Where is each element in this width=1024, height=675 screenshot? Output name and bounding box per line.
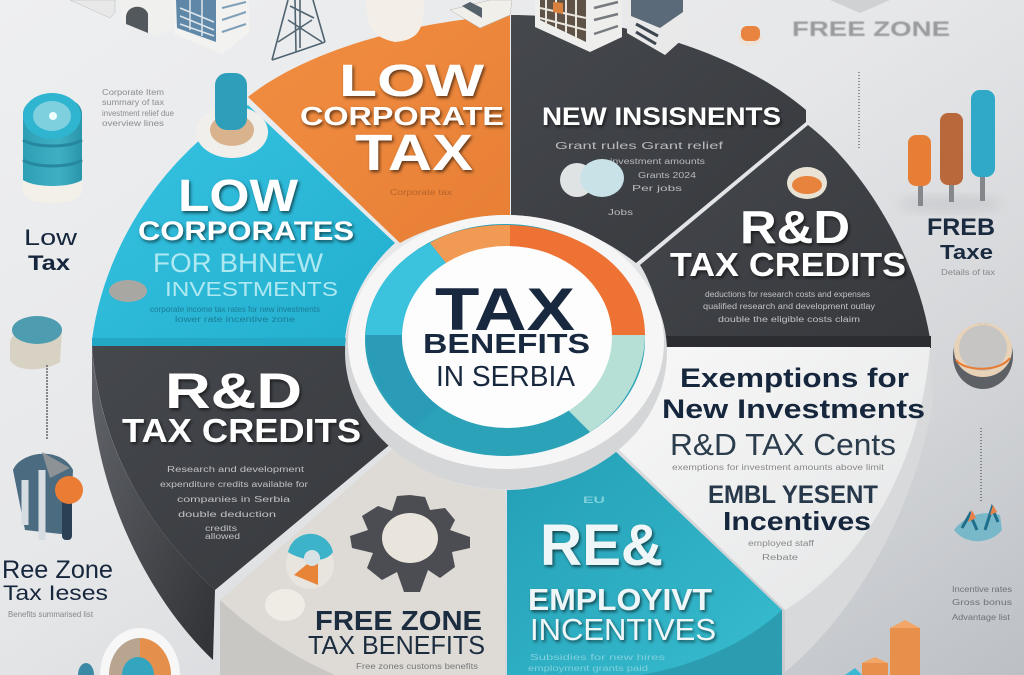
- small text: R&D left: credits: [205, 524, 237, 533]
- center title: BENEFITS: [423, 328, 590, 359]
- small text: left upper: summary of tax: [102, 98, 164, 107]
- slice edge: cyan: [92, 338, 346, 346]
- text: for new investments: INVESTMENTS: [165, 279, 338, 301]
- center disc: [402, 246, 612, 428]
- text: low corporate tax: LOW: [339, 55, 485, 106]
- ring: light orange arc: [430, 225, 510, 268]
- slice side: teal edge: [640, 610, 782, 675]
- label: freb taxe: Details of tax: [941, 268, 995, 277]
- icon: orange slice building: [450, 0, 512, 28]
- icon: small building far left: [70, 0, 115, 18]
- label: freb taxe: FREB: [927, 214, 995, 241]
- ring: orange arc: [430, 225, 645, 335]
- text: exemptions: employed staff: [748, 539, 815, 548]
- small text: new investments: Grant rules Grant relief: [555, 141, 723, 152]
- text: R&D tax credits left: R&D: [165, 363, 302, 419]
- center title: [423, 276, 590, 393]
- icon: white pebbles: [560, 159, 624, 197]
- text: for new investments: [153, 248, 338, 301]
- label: freb taxe: Taxe: [940, 242, 993, 264]
- slice: new investments dark: [511, 15, 806, 263]
- small text: new investments: Per jobs: [632, 184, 682, 193]
- text: free zone tax benefits: [308, 605, 485, 660]
- icon: blue grid building: [172, 0, 250, 54]
- small text: new investments: investment amounts: [610, 157, 705, 166]
- slice: R&D left dark: [92, 346, 393, 590]
- text: RE& employment: INCENTIVES: [530, 612, 716, 647]
- text: RE& employment: RE&: [540, 513, 663, 578]
- text: low corporate tax: [300, 55, 504, 181]
- orange pill: [908, 135, 931, 206]
- label: ree zone tax: Ree Zone: [2, 556, 113, 584]
- label: ree zone tax: Benefits summarised list: [8, 610, 94, 619]
- slice: exemptions white: [614, 347, 930, 610]
- small text: R&D left: companies in Serbia: [177, 495, 291, 504]
- text: new insisnents: NEW INSISNENTS: [542, 103, 781, 131]
- text: low corporates: LOW: [178, 170, 299, 221]
- small text: free zone: Free zones customs benefits: [356, 662, 478, 671]
- center title: TAX: [435, 276, 575, 343]
- slice: free zone beige: [220, 447, 505, 675]
- text: exemptions: Exemptions for: [680, 363, 910, 393]
- slice side: beige extrusion: [220, 600, 335, 675]
- small text: cyan slice: [150, 305, 320, 324]
- small text: R&D left: [160, 465, 308, 541]
- disc base: [345, 215, 667, 489]
- text: RE& employment: EMPLOYIVT: [528, 582, 712, 617]
- small text: R&D right: deductions for research costs and expenses: [705, 290, 870, 299]
- brown pill: [940, 113, 963, 202]
- small text: right lower: [952, 585, 1012, 622]
- slice: employment teal: [507, 448, 782, 675]
- small text: employment: EU: [583, 495, 605, 505]
- small text: right lower: Incentive rates: [952, 585, 1012, 594]
- label: low tax: Tax: [28, 252, 70, 275]
- text: exemptions: Rebate: [762, 553, 799, 562]
- icon: orange token: [787, 167, 827, 199]
- icon: token on beige slice: [286, 534, 334, 589]
- icon: grid building: [535, 0, 622, 52]
- small text: R&D right: double the eligible costs claim: [718, 315, 860, 324]
- text: R&D tax credits left: TAX CREDITS: [122, 412, 361, 449]
- building group: top: [70, 0, 890, 60]
- text: RE& employment: [528, 513, 716, 647]
- text: R&D tax credits right: R&D: [740, 201, 850, 253]
- slice: low corporate tax orange: [248, 15, 510, 243]
- text: R&D tax credits right: TAX CREDITS: [670, 246, 906, 283]
- small text: R&D left: double deduction: [178, 510, 276, 519]
- icon: wrench figure: [13, 452, 83, 540]
- icon: cyan cylinder left: [23, 93, 82, 203]
- icon: dotted vertical connector: [858, 72, 860, 148]
- small text: R&D right: qualified research and development outlay: [703, 302, 875, 311]
- text: for new investments: FOR BHNEW: [153, 248, 324, 278]
- text: exemptions: New Investments: [662, 394, 925, 424]
- icon: ball left: [10, 316, 62, 440]
- ring: cyan arc: [366, 243, 450, 335]
- slice edge: R&D right: [662, 336, 931, 348]
- text: low corporate tax: TAX: [355, 124, 473, 181]
- small text: R&D left: expenditure credits available for: [160, 480, 308, 489]
- small text: new investments: Grants 2024: [638, 171, 697, 180]
- icon: white cup: [366, 0, 424, 42]
- center ring: [345, 215, 667, 489]
- slice side: white extrusion: [785, 347, 933, 672]
- small text: new investments: [555, 141, 723, 217]
- icon: cyan knob: [196, 73, 268, 158]
- small text: R&D right: [703, 290, 875, 324]
- small text: employment: Subsidies for new hires: [530, 653, 665, 662]
- text: exemptions: [662, 363, 925, 562]
- label: low tax: Low: [24, 225, 77, 250]
- ring: teal base: [365, 224, 645, 456]
- bar shadow: [898, 196, 1002, 212]
- label: ree zone tax: Tax Ieses: [3, 582, 108, 605]
- slice side: left dark extrusion: [92, 347, 215, 660]
- text: exemptions: R&D TAX Cents: [670, 427, 896, 462]
- text: free zone tax benefits: TAX BENEFITS: [308, 630, 485, 660]
- small text: left upper: [102, 88, 175, 128]
- text: exemptions: exemptions for investment amounts above limit: [672, 463, 885, 472]
- icon: silver disc right: [953, 323, 1013, 389]
- small text: employment: employment grants paid: [528, 664, 648, 673]
- small text: employment: [528, 495, 665, 673]
- icon: pylon: [272, 0, 325, 60]
- small text: cyan slice: lower rate incentive zone: [175, 315, 296, 324]
- cyan pill: [971, 90, 995, 201]
- slice: low corporates cyan: [92, 105, 395, 340]
- icon: abstract splash: [954, 505, 1002, 541]
- slice: R&D right dark: [640, 125, 930, 338]
- icon: arched building: [120, 0, 172, 36]
- label: freb taxe: [927, 214, 995, 277]
- disc top: [348, 215, 664, 469]
- ring: blue arc: [366, 335, 440, 428]
- small text: orange slice: Corporate tax: [390, 188, 452, 197]
- text: exemptions: Incentives: [723, 506, 871, 536]
- small text: left upper: Corporate Item: [102, 88, 164, 97]
- label: low tax: [24, 225, 77, 275]
- label: ree zone tax: [2, 556, 113, 619]
- small text: left upper: investment relief due: [102, 109, 175, 118]
- icon: right dotted line: [980, 428, 982, 502]
- icon: striped building: [627, 0, 685, 55]
- text: exemptions: EMBL YESENT: [708, 481, 878, 509]
- small text: new investments: Jobs: [608, 208, 633, 217]
- text: low corporates: [138, 170, 354, 246]
- small text: R&D left: allowed: [205, 532, 240, 541]
- heading: free zone top right: FREE ZONE: [792, 18, 950, 41]
- icon: orange button: [738, 26, 762, 46]
- text: R&D tax credits right: [670, 201, 906, 283]
- icon: pebble with label: [265, 589, 305, 621]
- text: low corporate tax: CORPORATE: [300, 101, 504, 131]
- small text: right lower: Advantage list: [952, 613, 1011, 622]
- small text: cyan slice: corporate income tax rates for new investments: [150, 305, 320, 314]
- text: low corporates: CORPORATES: [138, 216, 354, 246]
- small text: R&D left: Research and development: [167, 465, 305, 474]
- icon: pie token bottom left: [78, 628, 180, 675]
- icon: stone pebble: [109, 280, 147, 302]
- center title: IN SERBIA: [436, 361, 576, 393]
- text: R&D tax credits left: [122, 363, 361, 449]
- small text: right lower: Gross bonus: [952, 598, 1012, 607]
- icon: gear: [350, 495, 470, 592]
- text: free zone tax benefits: FREE ZONE: [315, 605, 482, 636]
- bar chart: bottom right orange: [845, 620, 920, 675]
- bar chart: pills top right: [898, 90, 1002, 212]
- small text: left upper: overview lines: [102, 119, 164, 128]
- icon: top right box: [830, 0, 890, 13]
- ring: mint arc: [563, 335, 645, 432]
